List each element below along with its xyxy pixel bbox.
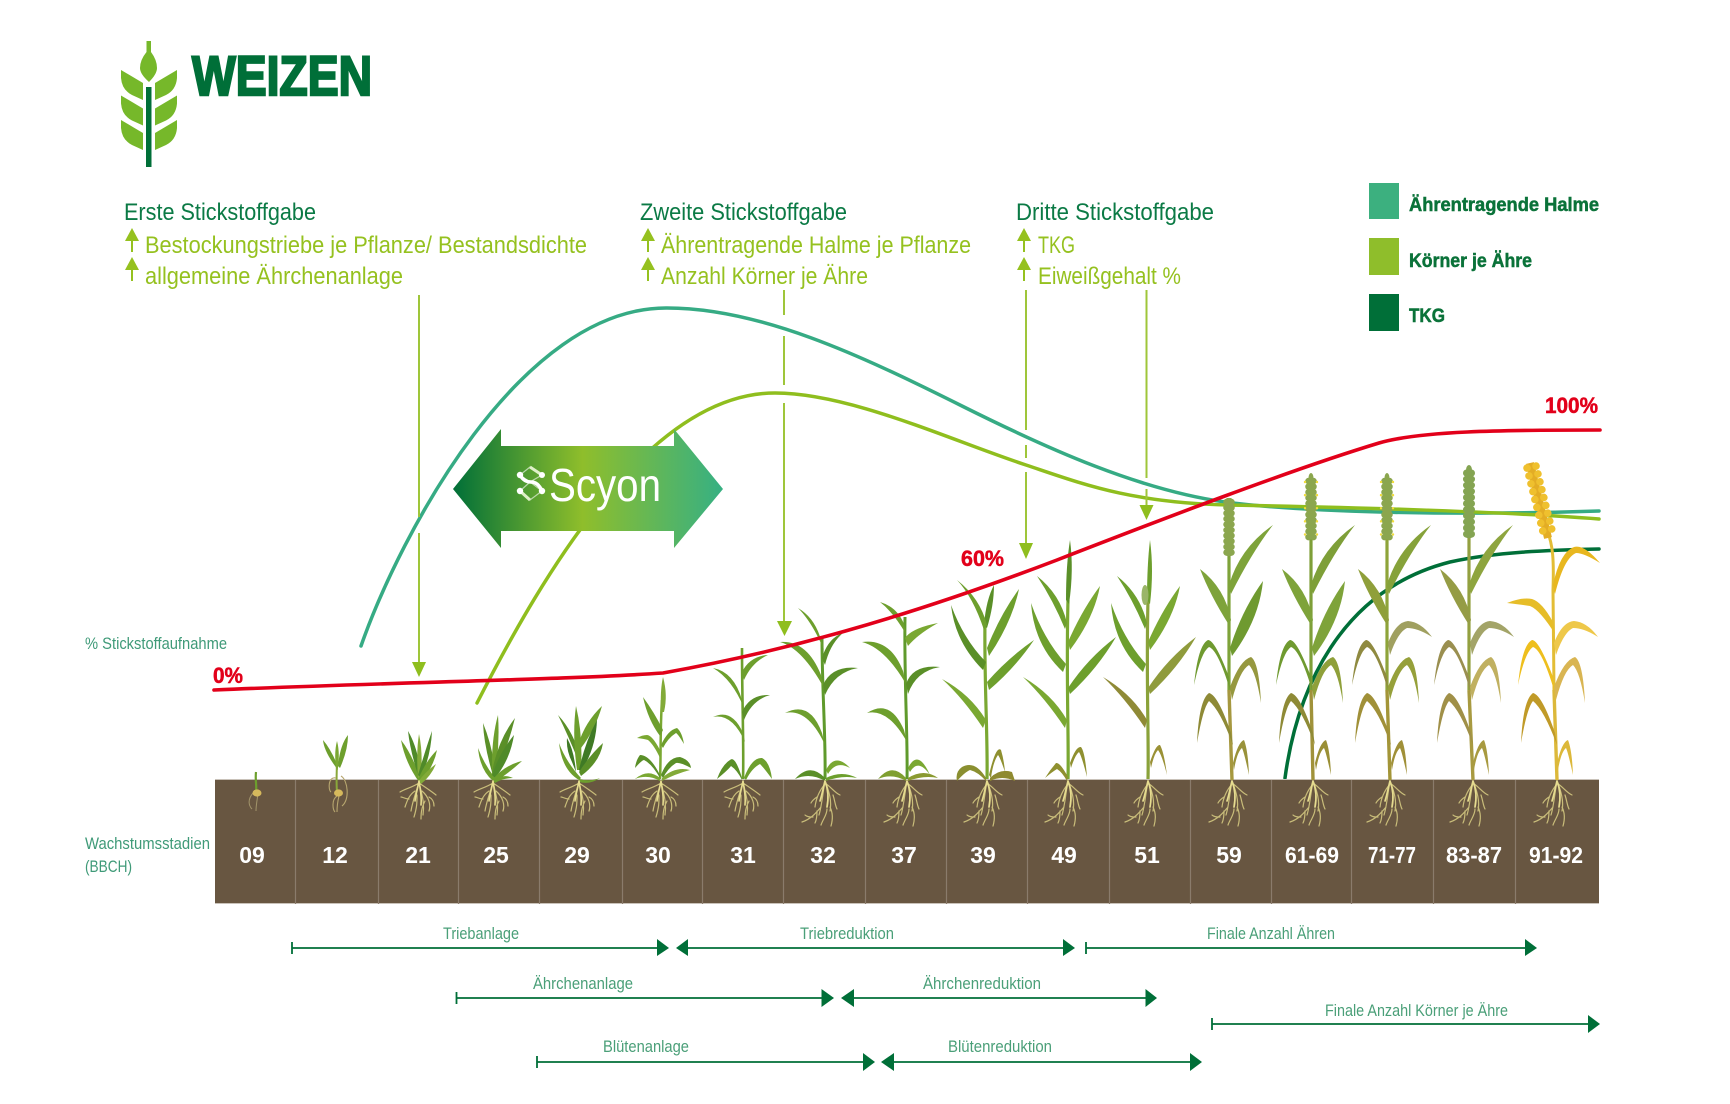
BBCH stage numbers: 37: [891, 842, 917, 868]
phase arrow: Blütenreduktion: [881, 1038, 1202, 1071]
Scyon double arrow: [453, 429, 723, 548]
text block: third nitrogen application: Eiweißgehalt %: [1038, 263, 1181, 290]
text block: first nitrogen application: Erste Stickstoffgabe: [124, 199, 316, 226]
label: growth stages: Wachstumsstadien: [85, 834, 210, 853]
label: 0%: 0%: [213, 663, 243, 688]
plant: BBCH 25: [474, 715, 522, 819]
curve: nitrogen uptake: [214, 430, 1600, 690]
phase arrow: Ährchenreduktion: [841, 975, 1157, 1007]
BBCH stage numbers: 71-77: [1368, 842, 1416, 868]
arrow: first application timing: [412, 295, 426, 677]
arrow: third application timing, protein: [1140, 290, 1154, 520]
text block: first nitrogen application: Bestockungstriebe je Pflanze/ Bestandsdichte: [145, 232, 587, 259]
text block: third nitrogen application: [1016, 199, 1214, 290]
phase arrow: Blütenanlage: Blütenanlage: [603, 1038, 689, 1056]
plant: BBCH 21: [400, 731, 437, 819]
BBCH stage numbers: 31: [730, 842, 756, 868]
text block: first nitrogen application: allgemeine Ährchenanlage: [145, 263, 403, 290]
phase arrow: Finale Anzahl Ähren: Finale Anzahl Ähren: [1207, 925, 1335, 943]
label: growth stages: (BBCH): [85, 857, 132, 876]
phase arrow: Finale Anzahl Körner je Ähre: [1212, 1002, 1600, 1033]
text block: third nitrogen application: Dritte Stickstoffgabe: [1016, 199, 1214, 226]
legend: TKG: [1409, 305, 1445, 327]
plant: BBCH 30: [635, 677, 691, 819]
label: nitrogen uptake axis: % Stickstoffaufnahme: [85, 634, 227, 653]
text block: first nitrogen application: [124, 199, 587, 290]
BBCH stage numbers: 32: [810, 842, 836, 868]
phase arrow: Blütenreduktion: Blütenreduktion: [948, 1038, 1052, 1056]
BBCH stage numbers: 21: [405, 842, 431, 868]
plant: BBCH 49: [1023, 540, 1116, 826]
plant: BBCH 31: [713, 648, 772, 819]
BBCH stage numbers: 39: [970, 842, 996, 868]
curve: Körner je Ähre: [477, 393, 1599, 703]
BBCH stage numbers: 29: [564, 842, 590, 868]
BBCH stage numbers: 09: [239, 842, 265, 868]
text block: second nitrogen application: Zweite Stickstoffgabe: [640, 199, 847, 226]
curve: Ährentragende Halme: [361, 308, 1599, 646]
Scyon double arrow: Scyon: [549, 459, 661, 511]
phase arrow: Ährchenreduktion: Ährchenreduktion: [923, 975, 1041, 993]
soil band with growth stage cells: [215, 779, 1599, 904]
phase arrow: Triebreduktion: Triebreduktion: [800, 925, 894, 943]
curve: TKG: [1285, 549, 1599, 778]
phase arrow: Triebanlage: Triebanlage: [443, 925, 519, 943]
plant: BBCH 91-92: [1507, 463, 1600, 826]
icon: Scyon logo mark: [517, 467, 545, 500]
arrow: second application timing: [777, 290, 792, 636]
text block: third nitrogen application: TKG: [1038, 232, 1075, 259]
plant: BBCH 29: [558, 706, 603, 819]
phase arrow: Triebanlage: [292, 925, 669, 956]
label: growth stages: [85, 834, 210, 876]
text block: second nitrogen application: Ährentragende Halme je Pflanze: [661, 232, 971, 259]
text block: second nitrogen application: [640, 199, 971, 290]
phase arrow: Triebreduktion: [676, 925, 1075, 956]
legend: [1369, 183, 1599, 331]
BBCH stage numbers: 59: [1216, 842, 1242, 868]
plant: BBCH 39: [942, 580, 1034, 826]
phase arrow: Finale Anzahl Ähren: [1086, 925, 1537, 956]
BBCH stage numbers: 25: [483, 842, 509, 868]
phase arrow: Blütenanlage: [537, 1038, 875, 1071]
title: WEIZEN: [192, 44, 372, 107]
legend: Ährentragende Halme: [1409, 193, 1599, 216]
BBCH stage numbers: 83-87: [1446, 842, 1502, 868]
BBCH stage numbers: 30: [645, 842, 671, 868]
plant: BBCH 61-69: [1276, 473, 1355, 826]
plant: BBCH 71-77: [1352, 473, 1432, 826]
plant: BBCH 32: [780, 608, 858, 826]
phase arrow: Ährchenanlage: [456, 975, 834, 1007]
phase arrow: Finale Anzahl Körner je Ähre: Finale Anzahl Körner je Ähre: [1325, 1002, 1508, 1020]
plant: BBCH 59: [1194, 498, 1273, 826]
plant: BBCH 12: [323, 735, 348, 812]
arrow: third application timing, TKG: [1019, 290, 1033, 559]
plant: BBCH 37: [862, 602, 940, 826]
BBCH stage numbers: 51: [1134, 842, 1160, 868]
plant: BBCH 09: [249, 772, 262, 811]
legend: Körner je Ähre: [1409, 249, 1532, 272]
phase arrow: Ährchenanlage: Ährchenanlage: [533, 975, 633, 993]
BBCH stage numbers: [239, 842, 1583, 868]
BBCH stage numbers: 61-69: [1285, 842, 1339, 868]
BBCH stage numbers: 12: [322, 842, 348, 868]
label: 60%: 60%: [961, 546, 1004, 571]
label: 100%: 100%: [1545, 393, 1598, 418]
logo: wheat ear icon: [121, 41, 177, 167]
plant: BBCH 83-87: [1434, 465, 1514, 826]
text block: second nitrogen application: Anzahl Körner je Ähre: [661, 263, 868, 290]
BBCH stage numbers: 91-92: [1529, 842, 1583, 868]
plant: BBCH 51: [1103, 540, 1196, 826]
BBCH stage numbers: 49: [1051, 842, 1077, 868]
